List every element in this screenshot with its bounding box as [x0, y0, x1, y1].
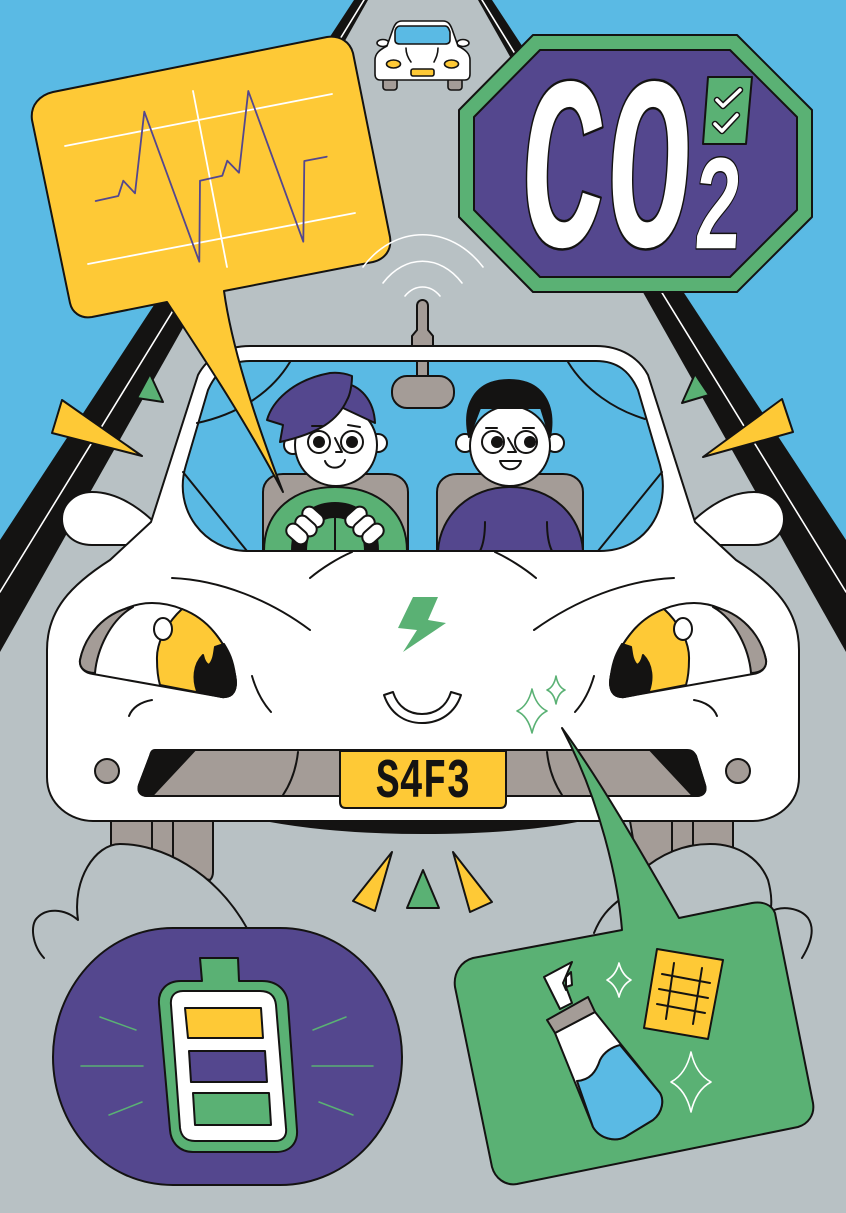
battery panel — [53, 928, 402, 1185]
wifi signal — [363, 235, 483, 296]
headlight right — [610, 603, 766, 697]
antenna — [412, 300, 433, 347]
CO2 octagon sign — [459, 35, 812, 323]
driver seat — [263, 474, 408, 551]
headlight left — [80, 603, 236, 697]
driver — [267, 373, 387, 486]
side signal arrows — [52, 374, 793, 457]
small distant car — [375, 21, 470, 90]
side mirror left — [62, 492, 152, 545]
speech bubble: green cleaning — [455, 728, 813, 1184]
direction arrows — [353, 852, 492, 912]
licence plate — [340, 751, 506, 814]
icon: lightning bolt — [398, 597, 446, 652]
icon: spray bottle — [544, 962, 662, 1139]
windshield — [183, 361, 663, 551]
CO text: O — [599, 40, 699, 323]
charge rays — [81, 1017, 373, 1115]
fog lights — [95, 759, 750, 783]
chart grid — [65, 91, 355, 267]
CO text: C — [513, 40, 613, 323]
rear view mirror — [392, 361, 454, 408]
subscript 2: 2 — [689, 135, 747, 291]
car body — [47, 346, 799, 821]
steering wheel — [264, 487, 407, 551]
sparkles on car — [517, 676, 565, 733]
icon: battery — [159, 958, 297, 1152]
passenger — [438, 380, 583, 551]
speech bubble: yellow chart — [32, 37, 390, 492]
car smile — [384, 692, 461, 723]
hood lines — [129, 552, 717, 716]
grille — [138, 750, 706, 796]
side mirror right — [694, 492, 784, 545]
licence plate: S4F3 — [376, 751, 470, 814]
icon: sponge — [644, 949, 723, 1039]
CO text — [513, 40, 699, 323]
chart line — [96, 91, 327, 262]
passenger seat — [437, 474, 583, 551]
exhaust cloud left — [33, 844, 248, 960]
underbody shadow — [270, 821, 577, 833]
sparkles — [607, 963, 711, 1112]
checklist — [703, 77, 752, 144]
rear tyres — [111, 821, 733, 880]
exhaust cloud right — [594, 844, 812, 960]
